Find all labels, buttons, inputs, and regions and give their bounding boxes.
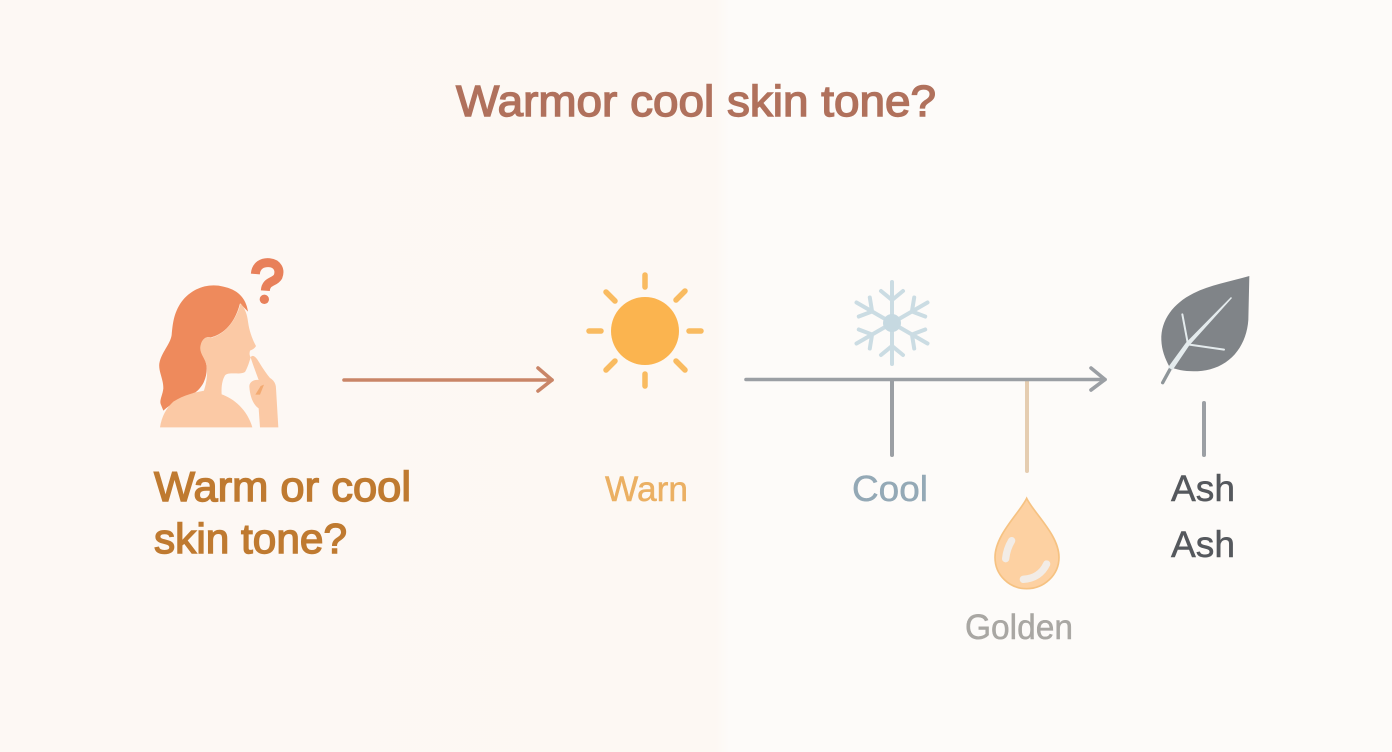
label: ash: Ash <box>1171 524 1235 565</box>
icon: snowflake <box>851 282 933 364</box>
icon: golden drop <box>995 498 1059 589</box>
icon: leaf <box>1161 276 1249 383</box>
label: warm or cool skin tone: Warm or cool <box>154 463 411 510</box>
label: ash: Ash <box>1171 468 1235 509</box>
arrow: warm to ash with branch to cool <box>746 368 1105 455</box>
label: cool: Cool <box>852 468 928 509</box>
icon: sun <box>589 275 701 386</box>
hair <box>159 285 248 411</box>
label: golden: Golden <box>965 608 1073 647</box>
title: Warmor cool skin tone? <box>456 77 936 126</box>
label: warm or cool skin tone: skin tone? <box>154 515 347 562</box>
connector: line above ash <box>1202 403 1206 455</box>
label: warm or cool skin tone <box>154 463 411 562</box>
question mark <box>255 263 279 304</box>
body <box>160 390 252 427</box>
face and neck <box>200 303 256 398</box>
connector: tan line to golden <box>1025 381 1029 471</box>
arrow: person to warm <box>344 368 552 391</box>
hand <box>249 356 278 427</box>
label: warn: Warn <box>605 470 688 509</box>
thumb detail <box>255 385 264 395</box>
label: ash <box>1171 468 1235 565</box>
icon: person thinking with question mark <box>159 263 279 427</box>
